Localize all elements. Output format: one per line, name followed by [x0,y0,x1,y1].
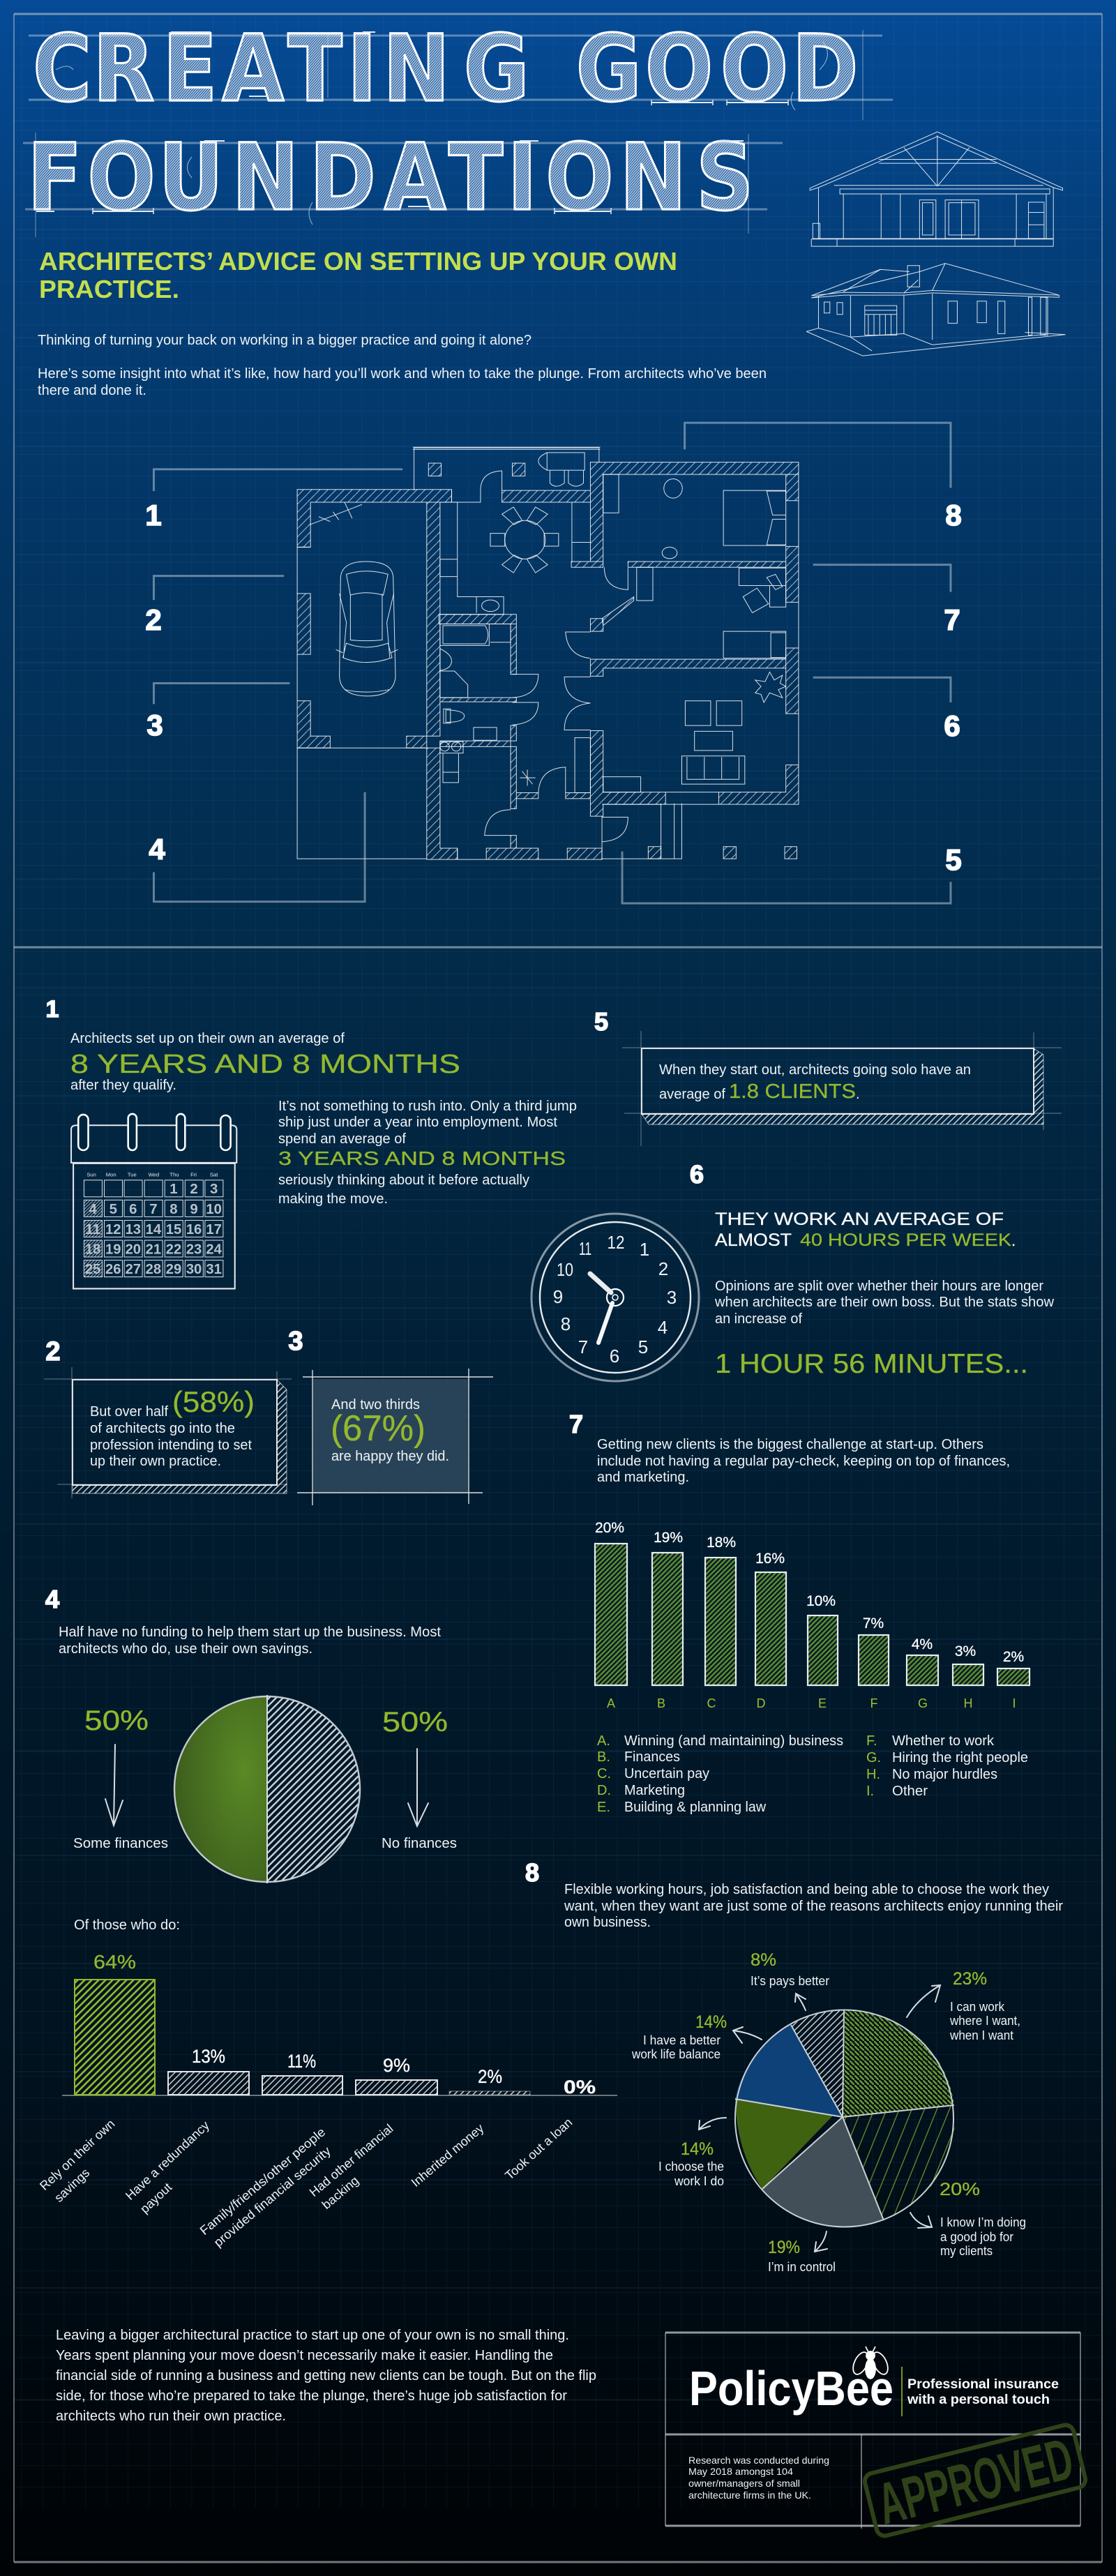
icon: calendar: 20 [126,1242,141,1257]
panel 7: challenges [569,1410,1030,1815]
title [23,15,893,237]
stat: no finances [382,1707,457,1851]
text block: seriously thinking about it before actually [278,1173,529,1188]
floor plan numbers: 1 [145,499,162,532]
kitchen and dining furniture [440,453,590,615]
text block: making the move. [278,1191,388,1207]
icon: calendar: 12 [105,1222,121,1237]
label: 14 percent choose [658,2118,726,2188]
bar chart: D [756,1696,766,1710]
subtitle: ARCHITECTS’ ADVICE ON SETTING UP YOUR OWN [39,247,677,276]
panel 2: 58 percent: of architects go into the [90,1421,235,1436]
subtitle [39,247,677,303]
bar chart: sources of funding: 2% [478,2066,502,2087]
text block [714,1279,1055,1327]
icon: calendar: Mon [106,1172,116,1178]
panel: floor plan [153,423,951,903]
text block: Architects set up on their own an average of [70,1031,345,1046]
icon: calendar: 29 [166,1262,181,1277]
label: 20 percent: 20% [940,2180,980,2199]
icon: calendar: 15 [166,1222,181,1237]
bar chart: B [657,1696,665,1710]
research note: Research was conducted during [688,2455,829,2466]
bar chart: sources of funding: 64% [93,1951,136,1973]
plant in garage [310,502,362,525]
conclusion text: architects who run their own practice. [56,2409,286,2424]
bathroom fixtures [440,624,511,783]
number 4: 4 [45,1585,59,1613]
conclusion text: side, for those who’re prepared to take the plunge, there’s huge job satisfaction for [56,2388,567,2404]
footer frame [665,2333,1080,2529]
icon: calendar: 6 [129,1202,137,1217]
legend: No major hurdles [892,1767,997,1782]
legend: D. [597,1783,611,1798]
bar chart: 20% [595,1520,624,1536]
icon: calendar: 16 [186,1222,202,1237]
shaded box [313,1379,468,1493]
icon: calendar: 1 [169,1182,178,1197]
number 2: 2 [45,1337,61,1366]
icon: clock: 5 [638,1336,648,1357]
icon: calendar: 28 [146,1262,161,1277]
icon: car [336,562,398,696]
label: 23 percent [907,1969,1020,2042]
bar chart: 2% [1003,1649,1024,1665]
icon: clock: 11 [579,1238,591,1259]
icon: clock: 2 [658,1258,668,1279]
icon: clock: 9 [553,1286,563,1307]
legend: Building & planning law [624,1800,767,1815]
icon: calendar: 5 [110,1202,117,1217]
icon: calendar: Thu [169,1172,179,1178]
number 7: 7 [569,1410,583,1438]
bar chart: 7% [863,1615,884,1632]
text block: 3 YEARS AND 8 MONTHS [278,1147,566,1169]
heading: 40 HOURS PER WEEK [800,1230,1011,1250]
text block: Flexible working hours, job satisfaction and being able to choose the work they [564,1882,1049,1897]
bar chart: I [1012,1696,1016,1710]
text block [278,1099,577,1207]
floor plan numbers: 6 [944,709,960,742]
legend: G. [866,1750,881,1765]
panel 5: clients: When they start out, architects going solo have an [659,1062,971,1078]
icon: calendar: 27 [126,1262,141,1277]
logo: PolicyBee: with a personal touch [907,2393,1050,2407]
bar chart: sources of funding [37,1951,617,2250]
label: 23 percent: where I want, [949,2014,1020,2028]
bar chart: sources of funding: Had other financial [307,2121,396,2199]
label: 14 percent balance [631,2012,762,2061]
sketched box [44,1367,292,1498]
panel 5: clients: 1.8 CLIENTS [729,1080,856,1103]
pie chart: funding split [174,1695,360,1883]
label: 23 percent: when I want [949,2028,1013,2042]
bar chart: 3% [955,1643,976,1659]
label: 19 percent: 19% [768,2238,800,2257]
text block: when architects are their own boss. But the stats show [714,1295,1055,1310]
icon: calendar: Sun [86,1172,96,1178]
intro text: Thinking of turning your back on working in a bigger practice and going it alone? [38,333,531,348]
title line: foundations: FOUNDATIONS [27,124,754,232]
panel 8: reasons [525,1858,1063,2274]
legend: F. [866,1733,877,1749]
icon: calendar: 23 [186,1242,202,1257]
research note: May 2018 amongst 104 [688,2466,793,2477]
bar chart [595,1520,1030,1710]
panel 3: 67 percent [288,1327,493,1505]
panel 5: clients [594,1007,1062,1146]
bar chart: 19% [654,1530,683,1546]
number 6: 6 [690,1160,704,1189]
number 3: 3 [288,1327,303,1356]
icon: calendar: 11 [85,1222,100,1237]
subtitle: PRACTICE. [39,275,179,303]
stat: some finances [73,1705,168,1851]
label: 8 percent: It’s pays better [751,1974,829,1988]
sketched box [622,1031,1062,1146]
icon: calendar: Fri [190,1172,197,1178]
bar chart: 16% [755,1551,785,1567]
text block [564,1882,1063,1930]
intro text: Here’s some insight into what it’s like, how hard you’ll work and when to take the plunge. From architects who’ve been [38,366,767,382]
bar chart: sources of funding: 9% [383,2055,410,2076]
bar chart: C [707,1696,716,1710]
legend: Marketing [624,1783,685,1798]
bar chart: E [818,1696,827,1710]
title construction lines [23,30,893,237]
bar chart: sources of funding: savings [52,2166,92,2205]
legend: Winning (and maintaining) business [624,1733,843,1749]
logo: PolicyBee: PolicyBee [689,2361,893,2416]
floor plan numbers: 5 [945,843,962,876]
text block: an increase of [715,1311,802,1327]
text block: 8 YEARS AND 8 MONTHS [70,1050,460,1079]
heading: THEY WORK AN AVERAGE OF [715,1210,1004,1229]
research note: architecture firms in the UK. [688,2490,811,2501]
callout lines [153,423,951,903]
icon: house perspective [806,264,1066,356]
label: 23 percent: I can work [950,2000,1005,2014]
label: 14 percent choose: I choose the [658,2160,724,2174]
icon: clock: 1 [640,1239,649,1260]
conclusion text [56,2328,596,2424]
text block [597,1437,1010,1485]
icon: clock: 12 [607,1232,625,1253]
icon: calendar: 13 [126,1222,141,1237]
footer panel [665,2333,1087,2539]
label: 20 percent [910,2180,1026,2258]
icon: clock: 10 [557,1259,573,1280]
living room furniture [520,672,786,793]
icon: clock: 4 [658,1317,668,1338]
legend: C. [597,1766,611,1782]
bar chart: 10% [806,1593,836,1609]
icon: calendar: 8 [169,1202,178,1217]
bar chart: G [918,1696,928,1710]
conclusion text: financial side of running a business and getting new clients can be tough. But on the flip [56,2368,596,2383]
legend: Hiring the right people [892,1750,1028,1765]
bar chart: sources of funding: Rely on their own [37,2116,117,2193]
text block: Half have no funding to help them start up the business. Most [59,1625,441,1640]
floor plan numbers: 2 [145,603,162,636]
panel 2: 58 percent: profession intending to set [90,1438,252,1453]
label: 23 percent: 23% [953,1969,987,1989]
panel 3: 67 percent: And two thirds [331,1397,420,1413]
legend: Finances [624,1749,680,1765]
stamp: approved [863,2423,1087,2539]
icon: calendar: Wed [149,1172,159,1178]
logo: PolicyBee: Professional insurance [907,2377,1059,2392]
icon: calendar: 2 [190,1182,198,1197]
icon: calendar: 19 [105,1242,121,1257]
text block: and marketing. [597,1470,689,1485]
research note [688,2455,829,2501]
text block [59,1625,441,1657]
panel 2: 58 percent: (58%) [172,1385,255,1418]
icon: calendar: Tue [128,1172,137,1178]
floor plan rooms and doors [297,447,799,859]
bar chart: sources of funding: Family/friends/other people [197,2125,328,2238]
legend: A. [597,1733,610,1749]
icon: clock: 7 [578,1336,588,1357]
legend: Whether to work [892,1733,995,1749]
legend: H. [866,1767,880,1782]
panel 5: clients: . [856,1087,860,1102]
bar chart: H [964,1696,972,1710]
icon: calendar: 14 [146,1222,162,1237]
label: 14 percent choose: 14% [681,2139,714,2159]
stat: no finances: No finances [382,1836,457,1851]
legend [597,1733,1028,1815]
icon: calendar: 17 [206,1222,222,1237]
label: 14 percent balance: I have a better [643,2033,721,2047]
icon: calendar: 9 [190,1202,198,1217]
icon: calendar: 4 [89,1202,97,1217]
icon: calendar: 26 [105,1262,121,1277]
conclusion text: Years spent planning your move doesn’t necessarily make it easier. Handling the [56,2348,553,2363]
icon: clock [531,1214,699,1381]
icon: clock: 8 [561,1313,571,1334]
label: 14 percent choose: work I do [674,2174,724,2188]
panel 4: funding: Of those who do: [74,1918,180,1933]
label: 20 percent: a good job for [940,2230,1013,2244]
label: 14 percent balance: work life balance [631,2047,721,2061]
icon: calendar: 7 [149,1202,158,1217]
label: 20 percent: my clients [940,2244,993,2258]
bar chart: sources of funding: 11% [287,2051,316,2072]
label: 19 percent: I’m in control [768,2260,836,2274]
icon: calendar: 24 [206,1242,223,1257]
icon: calendar: 22 [166,1242,181,1257]
icon: calendar: 10 [206,1202,222,1217]
floor plan numbers: 4 [149,833,165,866]
number 5: 5 [594,1007,608,1036]
bar chart: sources of funding: Inherited money [409,2121,486,2190]
text block: include not having a regular pay-check, keeping on top of finances, [597,1454,1010,1469]
text block [70,1031,460,1093]
icon: clock: 3 [667,1287,677,1308]
panel 1: time before going solo [46,996,577,1288]
logo: PolicyBee [689,2347,1059,2416]
floor plan numbers: 3 [146,709,163,741]
bar chart: 18% [707,1535,736,1551]
text block: architects who do, use their own savings. [59,1641,312,1657]
panel 3: 67 percent: (67%) [331,1408,425,1449]
panel 2: 58 percent: up their own practice. [90,1454,221,1469]
floor plan numbers: 8 [945,499,962,532]
icon: calendar: Sat [210,1172,218,1178]
icon: calendar: 21 [146,1242,161,1257]
title line: creating good: CREATING GOOD [33,15,859,123]
bar chart: 4% [912,1636,933,1652]
intro text: there and done it. [38,383,146,398]
text block: Getting new clients is the biggest challenge at start-up. Others [597,1437,983,1452]
icon: calendar: 25 [85,1262,100,1277]
legend: E. [597,1800,610,1815]
pie chart: reasons [735,2010,955,2227]
icon: calendar [71,1114,236,1288]
bar chart: sources of funding: Have a redundancy [123,2118,212,2203]
icon: calendar: 31 [206,1262,222,1277]
icon: house elevation [810,132,1062,246]
icon: calendar: 18 [85,1242,100,1257]
legend: Uncertain pay [624,1766,709,1782]
panel 3: 67 percent: are happy they did. [331,1449,449,1464]
floor plan numbers [145,499,962,876]
label: 8 percent: 8% [751,1950,776,1970]
bar chart: A [607,1696,615,1710]
bar chart: sources of funding: provided financial security [211,2144,333,2250]
stat: some finances: Some finances [73,1836,168,1851]
intro text [38,333,767,398]
research note: owner/managers of small [688,2478,800,2489]
text block: after they qualify. [70,1078,176,1093]
icon: bee [850,2347,891,2379]
text block: spend an average of [278,1131,406,1147]
bar chart: sources of funding: 13% [192,2046,225,2067]
bar chart: sources of funding: 0% [564,2077,596,2097]
icon: clock: 6 [610,1346,619,1366]
conclusion text: Leaving a bigger architectural practice to start up one of your own is no small thing. [56,2328,569,2343]
text block: ship just under a year into employment. Most [278,1115,557,1130]
legend: Other [892,1784,928,1799]
label: 14 percent balance: 14% [695,2012,727,2032]
label: 19 percent [768,2231,836,2274]
label: 8 percent [751,1950,829,2010]
number 1: 1 [46,996,59,1023]
bar chart: sources of funding: backing [319,2174,361,2212]
panel 2: 58 percent [44,1337,292,1498]
number 8: 8 [525,1858,539,1887]
bar chart: F [870,1696,877,1710]
bedroom furniture [603,474,786,658]
legend: I. [866,1784,874,1799]
panel 6: hours [531,1160,1055,1381]
heading: . [1011,1232,1016,1249]
bar chart: sources of funding: payout [137,2180,174,2216]
bar chart: sources of funding: Took out a loan [502,2115,575,2183]
legend: B. [597,1749,610,1765]
stat: some finances: 50% [84,1705,149,1736]
text block: own business. [564,1915,651,1930]
heading [715,1210,1016,1250]
panel 2: 58 percent: But over half [90,1404,168,1419]
panel 5: clients: average of [659,1087,725,1102]
icon: calendar: 30 [186,1262,202,1277]
heading: ALMOST [715,1230,792,1250]
floor plan walls [297,462,799,859]
icon: calendar: 3 [210,1182,218,1197]
panel 4: funding [37,1585,617,2250]
text block: want, when they want are just some of the reasons architects enjoy running their [564,1899,1063,1914]
floor plan numbers: 7 [944,603,960,636]
stat: no finances: 50% [382,1707,448,1738]
text block: It’s not something to rush into. Only a third jump [278,1099,577,1114]
text block: Opinions are split over whether their hours are longer [715,1279,1043,1294]
big stat: 1 HOUR 56 MINUTES... [715,1349,1028,1379]
label: 20 percent: I know I’m doing [940,2215,1026,2229]
